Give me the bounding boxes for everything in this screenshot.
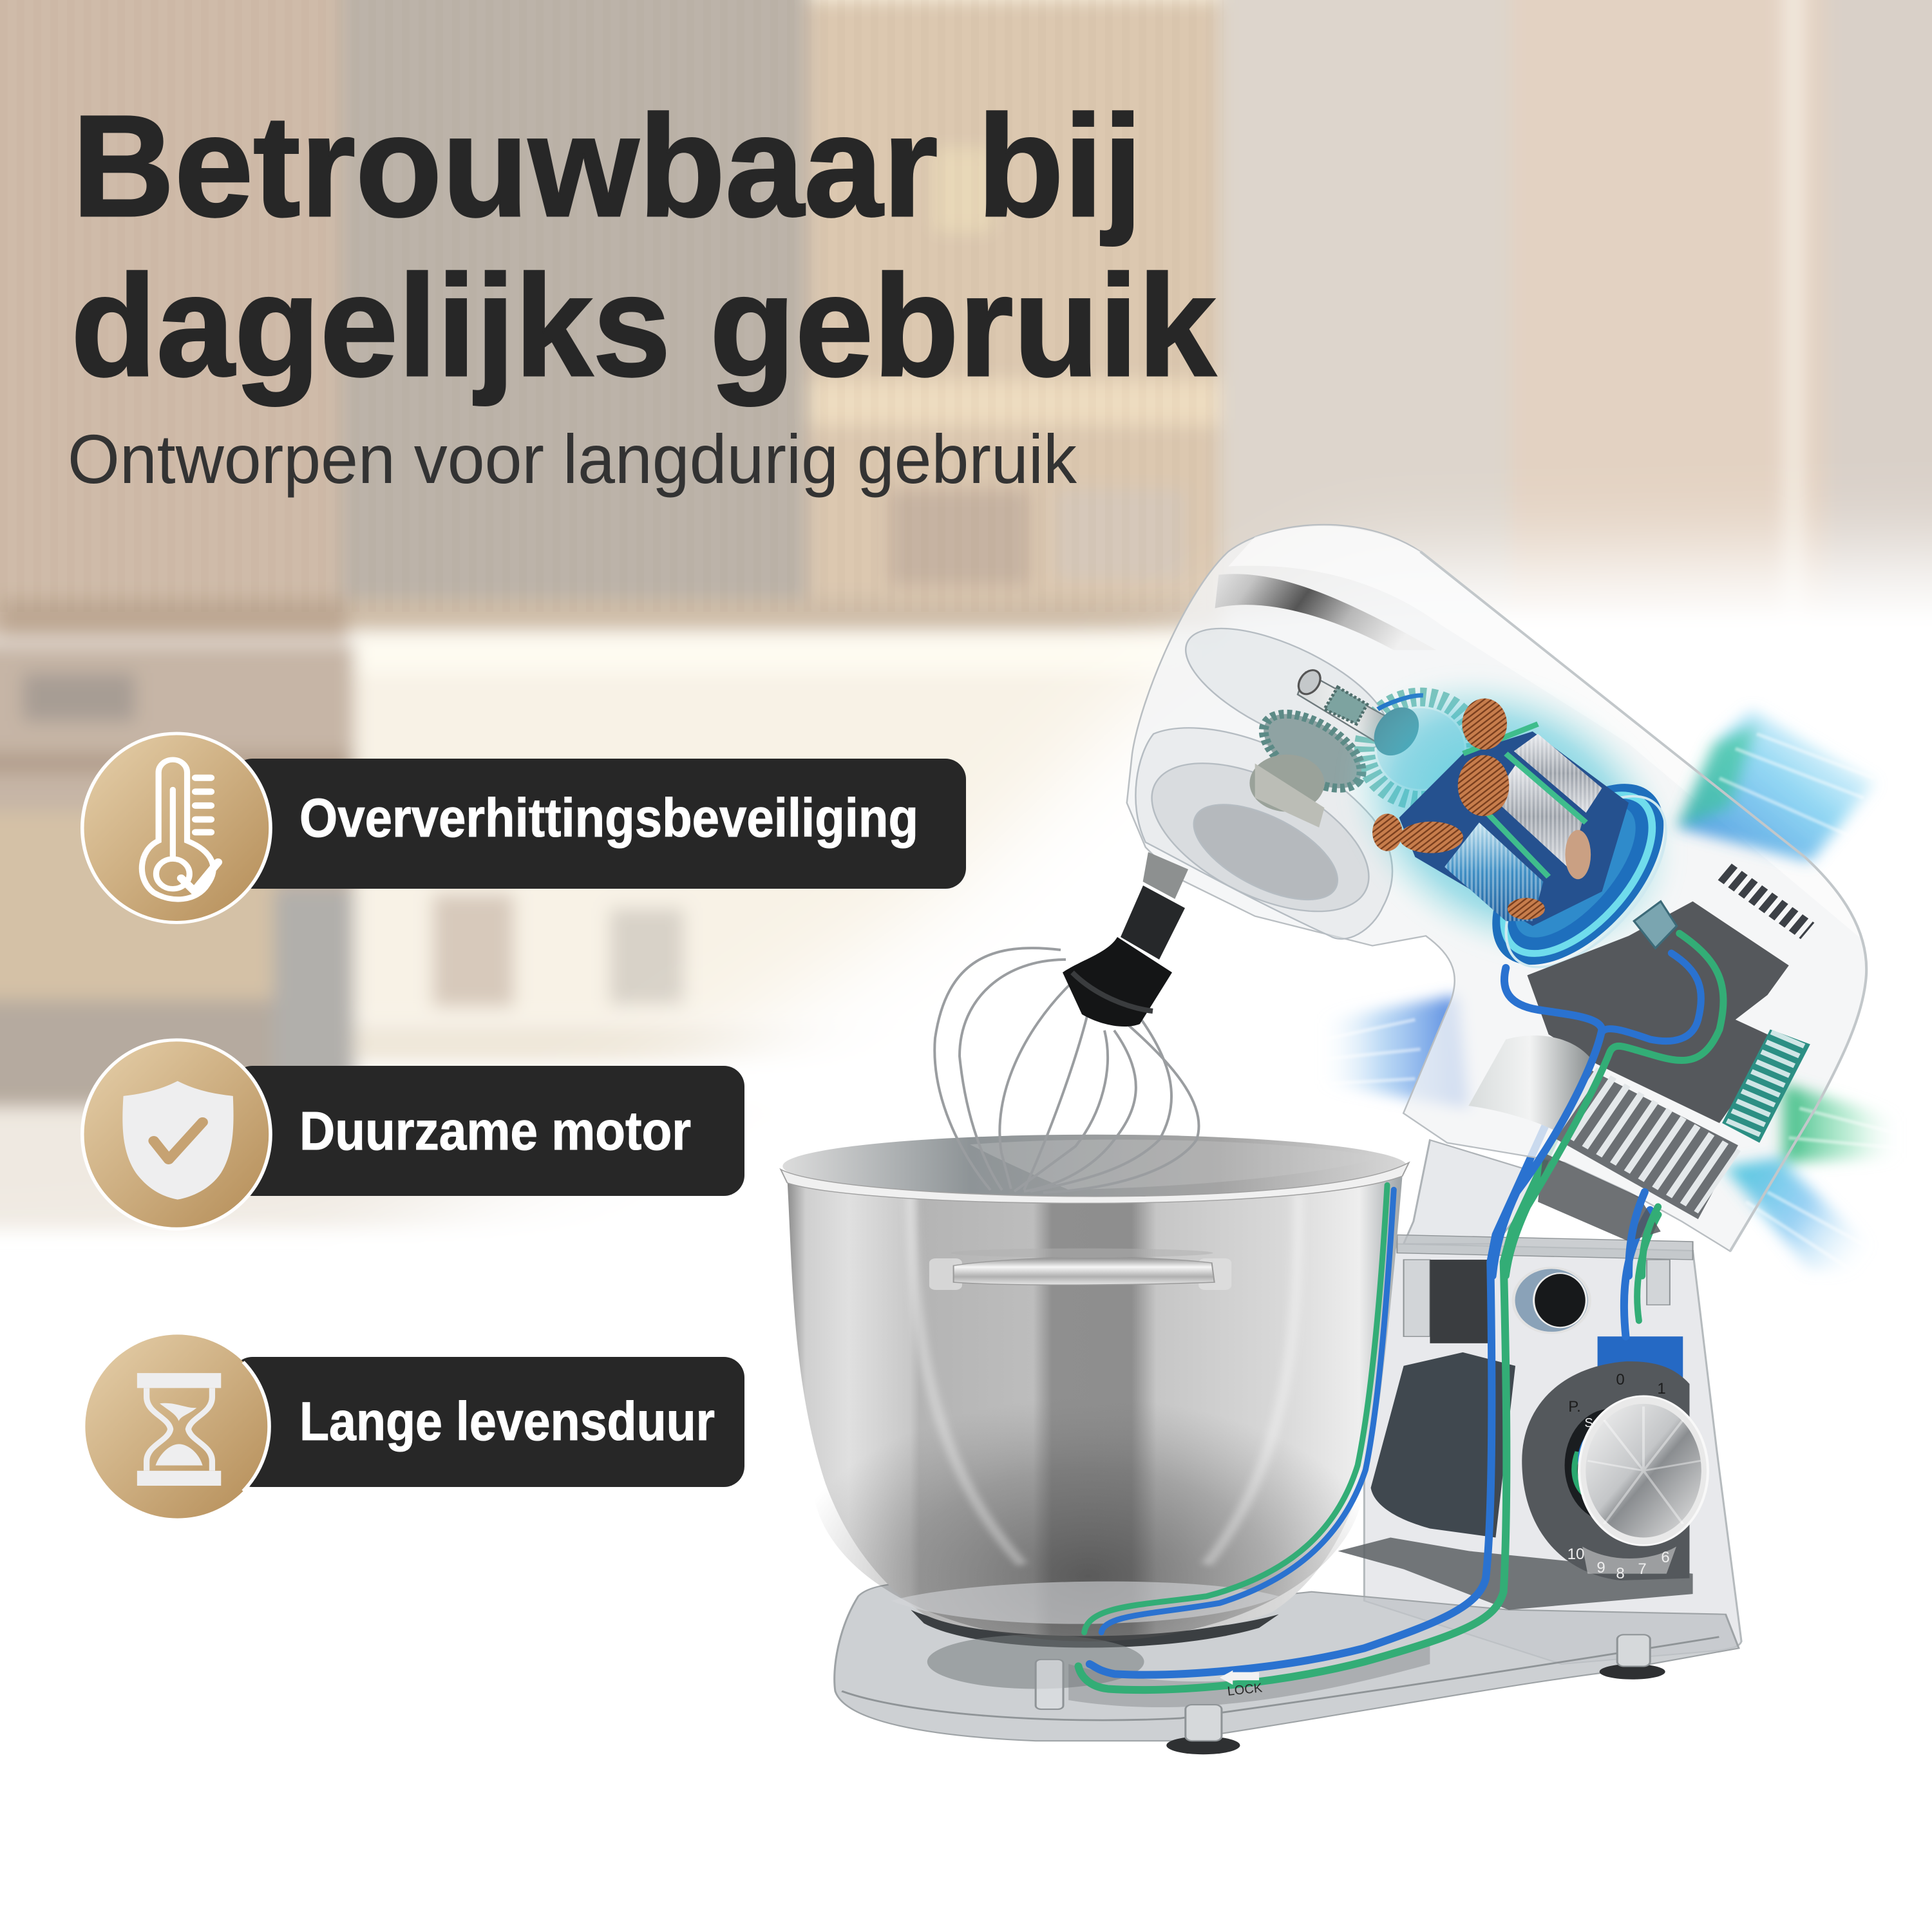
lift button <box>1513 1268 1589 1333</box>
icon: shield <box>82 1040 270 1229</box>
coolant tubes in head <box>1493 933 1723 1276</box>
feature: duurzame motor <box>82 1040 744 1229</box>
bowl seat shadow <box>911 1610 1279 1648</box>
dial labels: 7 <box>1638 1560 1647 1578</box>
mixer head <box>1126 525 1896 1276</box>
translucent lower neck <box>1404 1140 1548 1244</box>
lock arrow <box>1220 1671 1259 1685</box>
electronics block <box>1527 902 1789 1123</box>
chrome band <box>1215 574 1437 650</box>
feature: duurzame motor: Duurzame motor <box>299 1101 691 1161</box>
speed knob <box>1579 1396 1708 1545</box>
feature: oververhittingsbeveiliging: Oververhittingsbeveiliging <box>299 788 918 848</box>
planetary gears <box>1249 697 1477 828</box>
dial labels: 0 <box>1616 1371 1625 1388</box>
icon: hourglass <box>85 1334 270 1519</box>
motor glow <box>1283 614 1739 1021</box>
heat rays <box>1324 709 1896 1271</box>
dark base plate <box>1338 1537 1693 1610</box>
feature: lange levensduur <box>85 1334 744 1519</box>
feature: oververhittingsbeveiliging <box>82 734 966 922</box>
motor shaft <box>1294 667 1428 763</box>
feature: lange levensduur: Lange levensduur <box>299 1391 715 1452</box>
rear vent slots <box>1725 872 1808 931</box>
dial labels: 9 <box>1596 1559 1605 1577</box>
copper windings <box>1372 698 1591 920</box>
icon: thermometer <box>82 734 270 922</box>
base shadow strip <box>1068 1642 1430 1707</box>
motor stator <box>1399 724 1629 926</box>
dial labels: 10 <box>1567 1546 1584 1563</box>
feet <box>1036 1634 1665 1754</box>
stand mixer illustration <box>781 525 1896 1754</box>
coolant tubes along bowl and base <box>1078 1090 1658 1690</box>
lower gearbox <box>1538 1153 1661 1242</box>
whisk shaft <box>1143 852 1188 899</box>
dial labels: P. <box>1568 1398 1581 1416</box>
dial labels: S <box>1584 1416 1593 1430</box>
bowl handle <box>929 1249 1231 1290</box>
head gloss <box>1228 526 1864 941</box>
title: Betrouwbaar bij <box>72 86 1142 247</box>
whisk <box>934 948 1199 1193</box>
subtitle: Ontworpen voor langdurig gebruik <box>68 420 1077 498</box>
bowl rim <box>782 1135 1407 1198</box>
motor end ring <box>1459 756 1697 992</box>
heat rays behind shell <box>1324 995 1468 1108</box>
capacitor block <box>1430 1260 1489 1343</box>
mixer stem and base <box>781 1090 1741 1754</box>
translucent stem <box>1364 1244 1741 1664</box>
dial labels: 1 <box>1657 1380 1666 1397</box>
heat sink right <box>1722 1030 1810 1142</box>
inner base details <box>842 1637 1719 1720</box>
motor cylinder <box>1468 1036 1591 1133</box>
connector <box>1634 902 1677 948</box>
lock label: LOCK <box>1227 1681 1264 1699</box>
bowl foot <box>927 1634 1144 1689</box>
front housing <box>1126 604 1407 942</box>
heat sink lower <box>1554 1069 1738 1219</box>
dial labels: 6 <box>1661 1549 1670 1566</box>
head shell <box>1127 525 1866 1251</box>
stem collar <box>1397 1235 1693 1336</box>
shell outline <box>1421 551 1866 1251</box>
dial labels <box>1567 1371 1670 1582</box>
dial labels: 8 <box>1616 1565 1625 1582</box>
gearbox block <box>1371 1352 1515 1537</box>
translucent base <box>835 1583 1739 1741</box>
control plate <box>1522 1336 1689 1580</box>
bowl <box>781 1135 1409 1642</box>
title line 2: dagelijks gebruik <box>71 245 1216 406</box>
whisk hub <box>1063 886 1185 1027</box>
